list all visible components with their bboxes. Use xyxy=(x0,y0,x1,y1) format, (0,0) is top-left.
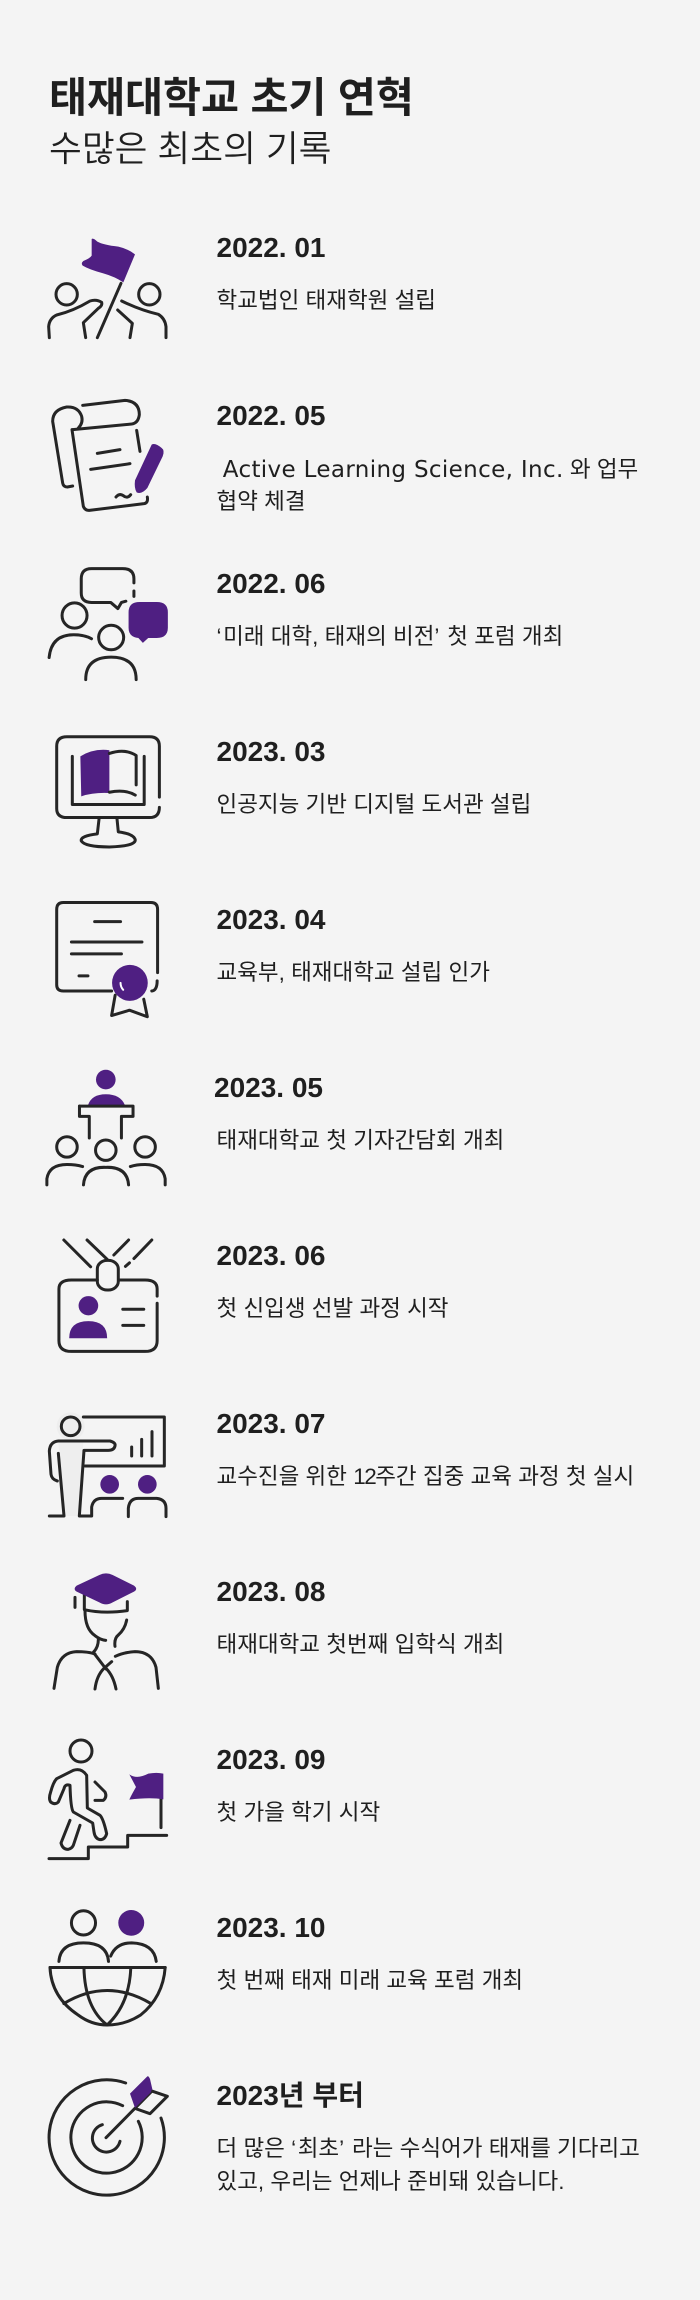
date: 2023년 부터 xyxy=(216,2080,364,2111)
timeline item: 2022. 01 xyxy=(47,232,436,340)
icon: person climbing stairs to a flag xyxy=(48,1738,168,1860)
icon: monitor with book xyxy=(55,735,161,848)
timeline item: 2023. 07 xyxy=(48,1408,634,1518)
date: 2023. 03 xyxy=(216,736,326,767)
date: 2023. 09 xyxy=(216,1744,326,1775)
title: 태재대학교 초기 연혁 xyxy=(49,75,414,121)
description: 협약 체결 xyxy=(216,489,306,514)
timeline item: 2022. 06 xyxy=(48,567,563,682)
icon: people with speech bubbles xyxy=(48,567,168,682)
description: 있고, 우리는 언제나 준비돼 있습니다. xyxy=(216,2168,565,2194)
timeline item: 2023년 부터 xyxy=(48,2076,640,2197)
date: 2023. 08 xyxy=(216,1576,326,1607)
description: ‘미래 대학, 태재의 비전’ 첫 포럼 개최 xyxy=(216,624,563,648)
timeline item: 2023. 10 xyxy=(48,1909,523,2026)
timeline item: 2023. 09 xyxy=(48,1738,380,1860)
description xyxy=(216,457,638,514)
date: 2023. 04 xyxy=(216,904,326,935)
date: 2023. 05 xyxy=(214,1072,323,1103)
icon: two people over a globe xyxy=(48,1909,167,2026)
icon: instructor at a board xyxy=(48,1416,168,1518)
date: 2023. 06 xyxy=(216,1240,326,1271)
subtitle: 수많은 최초의 기록 xyxy=(49,129,332,169)
icon: ID badge xyxy=(57,1238,159,1353)
description: 더 많은 ‘최초’ 라는 수식어가 태재를 기다리고 xyxy=(216,2136,640,2160)
description: Active Learning Science, Inc. 와 업무 xyxy=(223,457,638,483)
icon: two people raising a flag xyxy=(47,238,168,340)
timeline item: 2023. 04 xyxy=(55,901,490,1018)
icon: scroll and pen xyxy=(51,398,164,512)
date: 2022. 06 xyxy=(216,568,326,599)
timeline item: 2023. 05 xyxy=(45,1070,504,1186)
description: 태재대학교 첫번째 입학식 개최 xyxy=(216,1632,504,1656)
description: 교육부, 태재대학교 설립 인가 xyxy=(216,960,490,984)
date: 2023. 07 xyxy=(216,1408,326,1439)
timeline item: 2023. 08 xyxy=(52,1573,504,1690)
icon: target with arrow xyxy=(48,2076,169,2197)
timeline item: 2022. 05 xyxy=(51,398,638,514)
date: 2022. 05 xyxy=(216,400,326,431)
timeline item: 2023. 06 xyxy=(57,1238,449,1353)
icon: graduate with cap xyxy=(52,1573,160,1690)
icon: certificate with seal xyxy=(55,901,160,1018)
description: 교수진을 위한 12주간 집중 교육 과정 첫 실시 xyxy=(216,1464,634,1488)
description: 학교법인 태재학원 설립 xyxy=(216,288,436,312)
description: 첫 신입생 선발 과정 시작 xyxy=(216,1296,449,1320)
description: 태재대학교 첫 기자간담회 개최 xyxy=(216,1128,504,1152)
description: 인공지능 기반 디지털 도서관 설립 xyxy=(216,792,531,816)
date: 2023. 10 xyxy=(216,1912,326,1943)
timeline item: 2023. 03 xyxy=(55,735,531,848)
date: 2022. 01 xyxy=(216,232,326,263)
icon: press conference podium xyxy=(45,1070,167,1186)
description xyxy=(216,2136,640,2194)
description: 첫 가을 학기 시작 xyxy=(216,1800,380,1824)
description: 첫 번째 태재 미래 교육 포럼 개최 xyxy=(216,1968,523,1992)
